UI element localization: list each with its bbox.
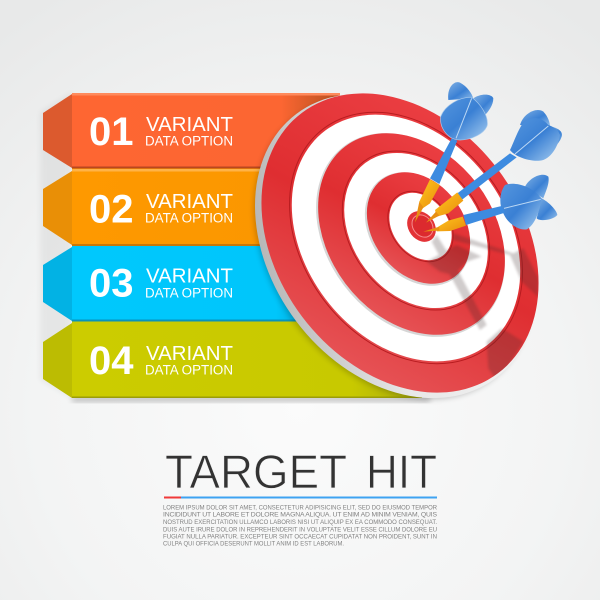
number 03: 03 [89, 262, 134, 306]
label: data option 02: DATA OPTION [145, 210, 233, 226]
label: data option 03: DATA OPTION [145, 285, 233, 300]
ribbon shadow [72, 396, 430, 402]
text block: body copy: INCIDIDUNT UT LABORE ET DOLORE MAGNA ALIQUA. UT ENIM AD MINIM VENIAM, QUIS [163, 512, 437, 519]
chart: target board [196, 39, 596, 454]
text block: body copy: NOSTRUD EXERCITATION ULLAMCO LABORIS NISI UT ALIQUIP EX EA COMMODO CONSEQUAT. [163, 519, 437, 526]
title: HIT [366, 445, 437, 498]
panel: ribbon 02 [43, 168, 312, 246]
icon: dart 2 [426, 110, 562, 223]
text block: body copy: FUGIAT NULLA PARIATUR. EXCEPTEUR SINT OCCAECAT CUPIDATAT NON PROIDENT, SUNT IN [163, 533, 437, 540]
panel: ribbon 03 [43, 246, 312, 322]
title: TARGET [165, 445, 347, 498]
dart shadows on board [427, 233, 538, 380]
text block: body copy: LOREM IPSUM DOLOR SIT AMET, CONSECTETUR ADIPISICING ELIT, SED DO EIUSMOD TEMPOR [163, 504, 437, 511]
label: variant 01: VARIANT [146, 114, 233, 136]
icon: dart 1 [415, 82, 493, 222]
title [165, 445, 437, 498]
label: variant 03: VARIANT [146, 266, 233, 288]
label: variant 02: VARIANT [146, 191, 233, 213]
label: data option 04: DATA OPTION [145, 362, 233, 377]
panel: ribbon 01 [43, 93, 340, 169]
number 02: 02 [89, 188, 134, 232]
tab shadow [40, 92, 72, 398]
text block: body copy: CULPA QUI OFFICIA DESERUNT MOLLIT ANIM ID EST LABORUM. [163, 540, 344, 547]
icon: dart 3 [423, 175, 557, 232]
number 04: 04 [89, 339, 134, 383]
text block: body copy: DUIS AUTE IRURE DOLOR IN REPREHENDERIT IN VOLUPTATE VELIT ESSE CILLUM DOLORE EU [163, 526, 437, 533]
label: data option 01: DATA OPTION [145, 134, 233, 148]
text block: body copy [163, 504, 437, 547]
panel: ribbon 04 [43, 322, 422, 398]
label: variant 04: VARIANT [146, 343, 233, 365]
divider line [164, 496, 437, 498]
number 01: 01 [89, 110, 134, 154]
